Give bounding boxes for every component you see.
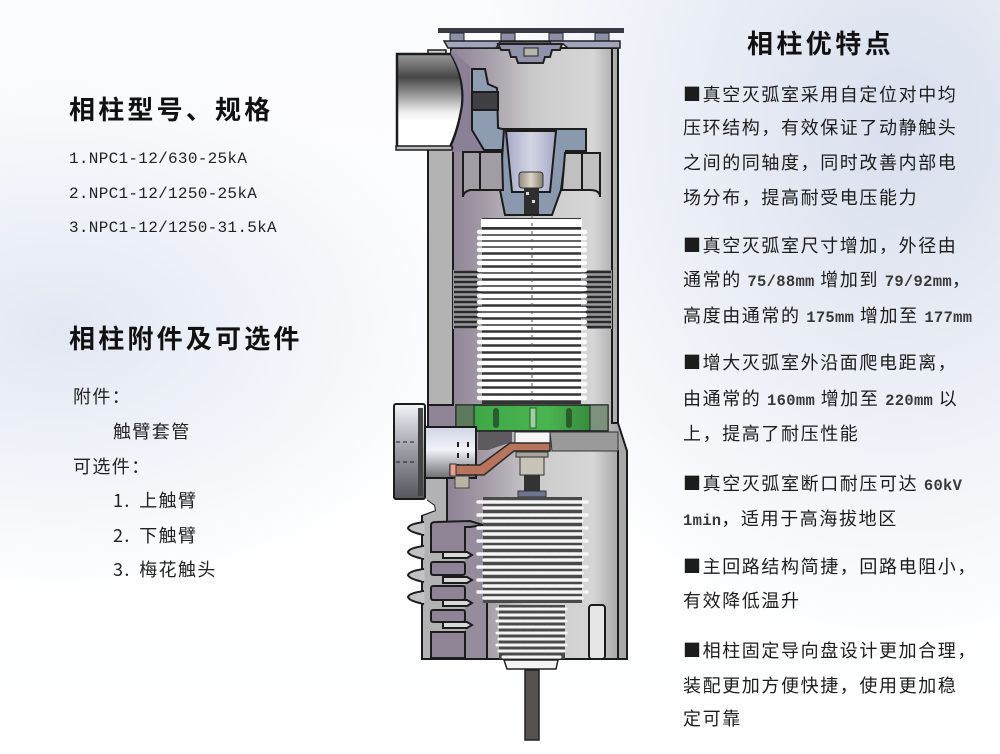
operating rod [525, 670, 539, 740]
feature 6 text: 装配更加方便快捷，使用更加稳 [683, 672, 957, 698]
accessories label: 附件： [73, 383, 131, 409]
feature 5 text: 有效降低温升 [683, 587, 801, 613]
feature 1 text: 之间的同轴度，同时改善内部电 [683, 149, 957, 175]
vacuum interrupter bellows [479, 215, 585, 404]
feature 5 text: ■主回路结构简捷，回路电阻小， [683, 553, 977, 579]
heading: accessories and options: 相柱附件及可选件 [69, 319, 303, 356]
option 2: 2. 下触臂 [113, 522, 197, 548]
feature 3 text: ■增大灭弧室外沿面爬电距离， [683, 349, 957, 375]
feature 1 text: 压环结构，有效保证了动静触头 [683, 114, 957, 140]
feature 1 text: ■真空灭弧室采用自定位对中均 [683, 81, 957, 107]
heading: pole features: 相柱优特点 [747, 24, 894, 61]
feature 3 text: 上，提高了耐压性能 [683, 420, 859, 446]
feature 2 text [683, 232, 972, 328]
connection block under ring [478, 432, 618, 451]
right guide slot [589, 605, 605, 659]
spec item 3: 3.NPC1-12/1250-31.5kA [69, 219, 277, 237]
feature 6 text [683, 637, 977, 731]
feature 2 text: 高度由通常的 175mm 增加至 177mm [683, 302, 972, 328]
spec item 1: 1.NPC1-12/630-25kA [69, 150, 247, 168]
feature 3 text [683, 349, 958, 446]
feature 6 text: 定可靠 [683, 705, 742, 731]
side outlet tube [396, 54, 463, 150]
feature 4 text [683, 470, 962, 531]
upper terminal casting [451, 50, 586, 215]
options label: 可选件： [73, 453, 151, 479]
copper contact arm [450, 443, 550, 488]
panel: model specifications [69, 90, 277, 237]
panel: accessories and options [69, 319, 303, 582]
inner rib column [431, 521, 483, 658]
green insulating ring [455, 405, 608, 431]
lower bellows [478, 497, 587, 669]
housing body [422, 48, 627, 659]
feature 1 text [683, 81, 957, 210]
stud nut and pole shaft [516, 452, 548, 497]
side insulated bushing and disc [394, 404, 476, 499]
fixing bolt [519, 172, 543, 214]
feature 1 text: 场分布，提高耐受电压能力 [683, 184, 918, 210]
feature 4 text: 1min，适用于高海拔地区 [683, 505, 898, 531]
feature 4 text: ■真空灭弧室断口耐压可达 60kV [683, 470, 962, 496]
feature 5 text [683, 553, 977, 613]
top cover plate [438, 28, 624, 63]
option 1: 1. 上触臂 [113, 487, 197, 513]
insulator fins behind interrupter [453, 270, 612, 329]
lower mounting ring [463, 152, 600, 197]
feature 2 text: ■真空灭弧室尺寸增加，外径由 [683, 232, 957, 258]
feature 2 text: 通常的 75/88mm 增加到 79/92mm， [683, 266, 972, 292]
spec item 2: 2.NPC1-12/1250-25kA [69, 185, 257, 203]
option 3: 3. 梅花触头 [113, 556, 217, 582]
accessory item: 触臂套管 [113, 418, 191, 444]
feature 3 text: 由通常的 160mm 增加至 220mm 以 [683, 385, 958, 411]
panel: pole features [683, 24, 977, 731]
heading: model and specifications: 相柱型号、规格 [69, 90, 273, 127]
left outer insulation sheds [408, 522, 424, 604]
feature 6 text: ■相柱固定导向盘设计更加合理， [683, 637, 977, 663]
